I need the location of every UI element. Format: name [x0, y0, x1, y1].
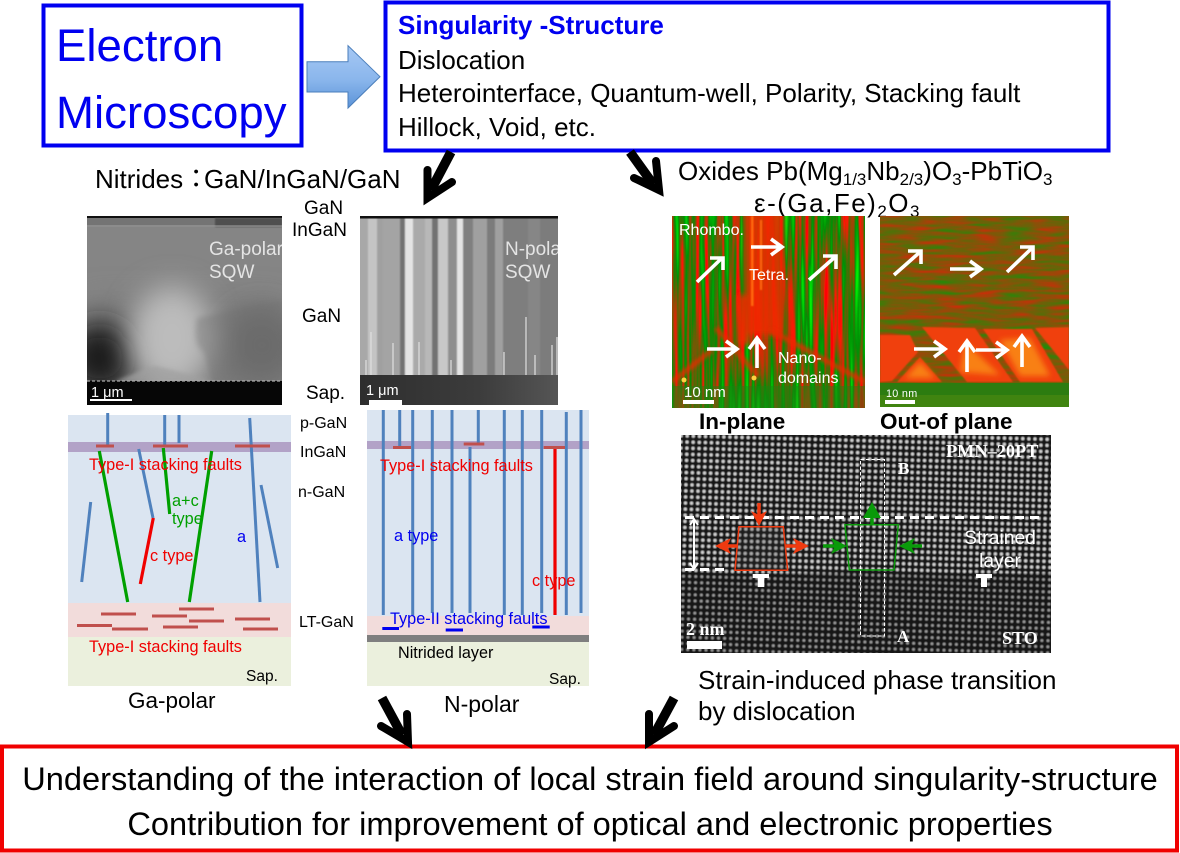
strained layer markers [685, 460, 1042, 636]
caption: strain-induced phase transition: Strain-induced phase transition [698, 665, 1056, 695]
map: out-of-plane strain [880, 216, 1069, 407]
schematic: Ga-polar dislocation diagram: Type-I stacking faults [89, 638, 242, 656]
schematic: N-polar dislocation diagram [367, 410, 589, 688]
image: Ga-polar TEM [64, 216, 298, 405]
title box: Electron Microscopy [44, 6, 302, 146]
layer labels: schematic: p-GaN [300, 415, 347, 432]
image: HRTEM lattice: STO [1002, 628, 1038, 648]
panel: singularity structure list: Hillock, Void, etc. [398, 112, 596, 142]
heading: oxides: 1/3 [843, 170, 866, 189]
panel: singularity structure list: Singularity -Structure [398, 10, 664, 40]
schematic: N-polar dislocation diagram: Type-I stacking faults [380, 457, 533, 475]
image: HRTEM lattice: Strained [964, 528, 1036, 549]
schematic: Ga-polar dislocation diagram: Sap. [246, 668, 278, 685]
title box: Electron Microscopy: Microscopy [56, 87, 287, 138]
layer labels: TEM: GaN [304, 198, 343, 219]
image: N-polar TEM [358, 216, 568, 405]
panel: singularity structure list: Dislocation [398, 45, 525, 75]
map: out-of-plane strain: 10 nm [886, 388, 918, 400]
heading: epsilon gallium ferrite: ε-(Ga,Fe) [754, 188, 877, 218]
map: in-plane strain: Tetra. [749, 267, 789, 284]
schematic: N-polar dislocation diagram: Sap. [549, 671, 581, 688]
heading: oxides: 3 [952, 170, 962, 189]
layer labels: schematic: LT-GaN [299, 614, 354, 631]
label: in-plane: In-plane [699, 409, 785, 434]
heading: oxides: 2/3 [900, 170, 923, 189]
arrow: black arrow to nitrides [428, 152, 452, 198]
arrow: black arrow to oxides [630, 152, 659, 190]
schematic: N-polar dislocation diagram: Nitrided layer [398, 644, 494, 662]
heading: oxides: Nb [866, 156, 900, 186]
arrows: in-plane polarization [697, 239, 836, 368]
panel: singularity structure list: Heterointerface, Quantum-well, Polarity, Stacking fault [398, 78, 1021, 108]
caption: Ga-polar: Ga-polar [128, 688, 216, 713]
image: N-polar TEM: SQW [505, 262, 550, 283]
caption: N-polar: N-polar [444, 691, 520, 717]
layer labels: schematic: n-GaN [298, 484, 345, 501]
arrow: blue arrow to singularity box [307, 46, 380, 108]
schematic: Ga-polar dislocation diagram: Type-I stacking faults [89, 456, 242, 474]
panel: singularity structure list [386, 2, 1108, 150]
title box: Electron Microscopy: Electron [56, 20, 223, 71]
heading: epsilon gallium ferrite: 3 [910, 202, 921, 221]
dislocation symbols [753, 574, 992, 587]
schematic: Ga-polar dislocation diagram: c type [150, 547, 193, 565]
map: in-plane strain: 10 nm [684, 384, 726, 401]
panel: conclusion [2, 746, 1177, 850]
image: Ga-polar TEM: Ga-polar [209, 239, 284, 260]
schematic: N-polar dislocation diagram: a type [394, 527, 438, 545]
map: in-plane strain [672, 210, 865, 408]
layer labels: TEM: InGaN [292, 220, 347, 241]
heading: oxides: )O [923, 156, 952, 186]
image: N-polar TEM: N-polar [505, 239, 568, 260]
image: N-polar TEM: 1 μm [366, 383, 399, 399]
heading: oxides: Oxides Pb(Mg [678, 156, 843, 186]
schematic: N-polar dislocation diagram: Type-II stacking faults [390, 610, 547, 628]
image: HRTEM lattice: PMN–20PT [946, 441, 1038, 461]
image: HRTEM lattice: layer [979, 551, 1021, 572]
heading: nitrides: GaN/InGaN/GaN [204, 164, 401, 194]
caption: strain-induced phase transition: by dislocation [698, 696, 856, 726]
layer labels: TEM: GaN [302, 306, 341, 327]
panel: conclusion: Contribution for improvement of optical and electronic properties [127, 805, 1053, 842]
red strain cell [715, 503, 809, 570]
map: in-plane strain: domains [778, 370, 838, 387]
layer labels: schematic: InGaN [300, 444, 346, 461]
image: HRTEM lattice: B [898, 459, 909, 478]
schematic: Ga-polar dislocation diagram [68, 413, 291, 686]
image: Ga-polar TEM: SQW [209, 262, 254, 283]
image: HRTEM lattice [675, 430, 1057, 658]
schematic: N-polar dislocation diagram: c type [532, 572, 575, 590]
map: in-plane strain: Rhombo. [679, 222, 744, 239]
heading: nitrides: Nitrides： [95, 164, 209, 194]
heading: epsilon gallium ferrite: 2 [877, 202, 888, 221]
schematic: Ga-polar dislocation diagram: a+c [172, 492, 199, 510]
image: Ga-polar TEM: 1 μm [91, 385, 124, 401]
caption: strain-induced phase transition [698, 665, 1056, 726]
label: out-of-plane: Out-of plane [880, 409, 1012, 434]
arrow: black arrow from oxides to conclusion [649, 698, 674, 742]
image: HRTEM lattice: A [897, 627, 910, 646]
layer labels: schematic [298, 415, 354, 631]
image: HRTEM lattice: 2 nm [686, 619, 725, 639]
heading: epsilon gallium ferrite: O [888, 188, 910, 218]
layer labels: TEM [292, 198, 347, 404]
heading: oxides: -PbTiO [962, 156, 1043, 186]
map: in-plane strain: Nano- [778, 350, 822, 367]
green strain cell [823, 502, 922, 570]
panel: conclusion: Understanding of the interaction of local strain field around singularity-structure [22, 760, 1158, 797]
layer labels: TEM: Sap. [306, 383, 345, 404]
arrow: black arrow from nitrides to conclusion [381, 698, 408, 742]
heading: oxides: 3 [1043, 170, 1052, 189]
schematic: Ga-polar dislocation diagram: a [237, 528, 247, 546]
schematic: Ga-polar dislocation diagram: type [172, 510, 203, 528]
arrows: out-of-plane polarization [894, 247, 1033, 372]
